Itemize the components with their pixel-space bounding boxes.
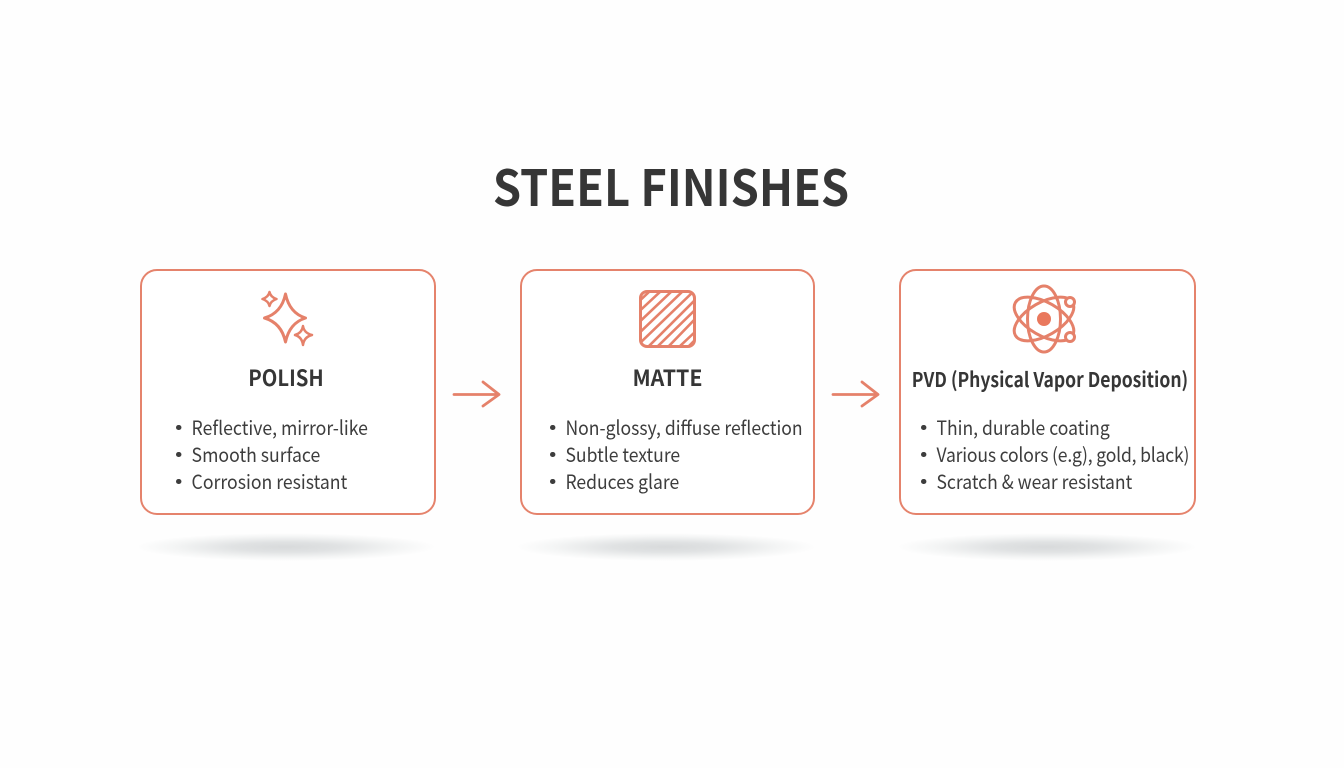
matte bullet list <box>550 412 802 495</box>
shadow under matte card <box>516 533 816 561</box>
shadow under polish card <box>136 533 436 561</box>
polish bullet list: Smooth surface <box>191 439 320 468</box>
polish bullet list: Reflective, mirror-like <box>191 412 367 441</box>
matte heading: MATTE <box>632 361 703 393</box>
PVD bullet list <box>921 412 1189 495</box>
PVD bullet list: Various colors (e.g), gold, black) <box>936 439 1189 468</box>
polish bullet list: Corrosion resistant <box>191 466 347 495</box>
title: STEEL FINISHES <box>493 149 849 221</box>
icon: hatched square <box>639 290 696 348</box>
panel: polish <box>140 269 436 515</box>
matte bullet list: Reduces glare <box>565 466 679 495</box>
PVD bullet list: Scratch & wear resistant <box>936 466 1132 495</box>
panel: matte <box>520 269 815 515</box>
PVD heading: PVD (Physical Vapor Deposition) <box>911 363 1188 393</box>
PVD bullet list: Thin, durable coating <box>936 412 1109 441</box>
shadow under PVD card <box>897 533 1197 561</box>
polish heading: POLISH <box>248 361 324 393</box>
matte bullet list: Subtle texture <box>565 439 680 468</box>
polish bullet list <box>176 412 368 495</box>
matte bullet list: Non-glossy, diffuse reflection <box>565 412 802 441</box>
panel: PVD <box>899 269 1196 515</box>
